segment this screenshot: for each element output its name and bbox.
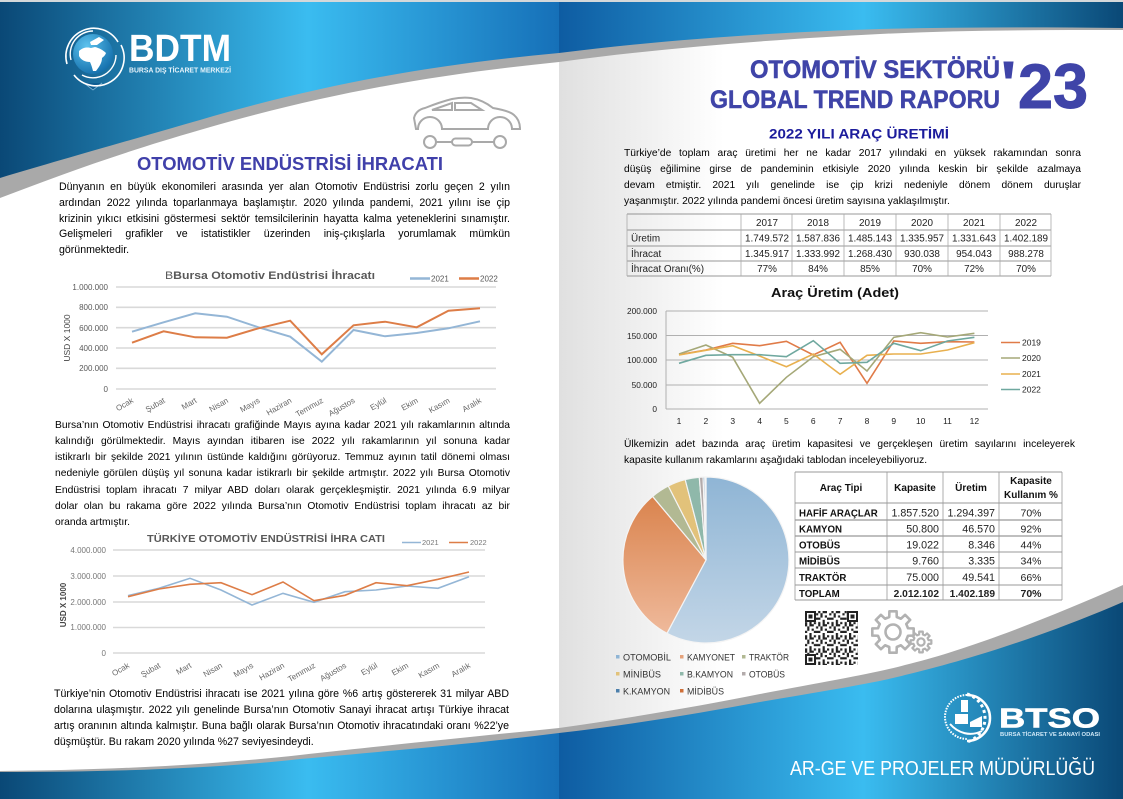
logo subtitle: BURSA TİCARET VE SANAYİ ODASI xyxy=(1000,731,1100,738)
legend: 2022 xyxy=(1022,384,1041,394)
table: capacity usage: 1.857.520 xyxy=(891,508,939,520)
line: 2022 xyxy=(679,337,974,363)
table: production and exports: İhracat Oranı(%) xyxy=(631,264,704,275)
table: capacity usage: 46.570 xyxy=(962,524,995,536)
table: capacity usage: 50.800 xyxy=(906,524,939,536)
text block: capacity intro xyxy=(624,438,1075,466)
table: capacity usage: 75.000 xyxy=(906,572,939,584)
table: capacity usage: 1.294.397 xyxy=(947,508,995,520)
table: capacity usage: Araç Tipi xyxy=(820,483,863,494)
table: capacity usage: KAMYON xyxy=(799,524,842,536)
text block: production intro: devam etmiştir. 2021 yılı genelinde ise çip krizi nedeniyle dönem dönem duruşlar xyxy=(624,180,1081,191)
y axis labels: 0 xyxy=(652,404,657,414)
y axis labels: 0 xyxy=(104,385,109,394)
table: production and exports: 1.402.189 xyxy=(1004,234,1048,244)
y axis labels: 100.000 xyxy=(627,355,657,365)
x axis labels: 3 xyxy=(730,416,735,426)
y axis labels xyxy=(70,546,107,658)
x axis labels: Ekim xyxy=(390,661,410,678)
x axis labels: Aralık xyxy=(450,660,473,679)
line: 2022 xyxy=(132,308,480,354)
banner: top right wave xyxy=(559,2,1123,62)
logo: BDTM xyxy=(66,28,231,90)
table: production and exports: 77% xyxy=(757,264,777,275)
x axis labels: Ağustos xyxy=(318,661,348,683)
x axis labels: 5 xyxy=(784,416,789,426)
report title: OTOMOTİV SEKTÖRÜ xyxy=(750,55,1000,84)
banner: bottom left wave xyxy=(0,728,559,799)
table: capacity usage: 3.335 xyxy=(968,556,995,568)
table: capacity usage: 34% xyxy=(1020,556,1042,568)
pie legend: OTOBÜS xyxy=(749,670,785,680)
text block: intro paragraph: Dünyanın en büyük ekonomileri arasında yer alan Otomotiv Endüstrisi zorlu geçen 2 yılın xyxy=(59,181,510,193)
icon: car with chassis xyxy=(414,98,520,148)
pie legend: MİDİBÜS xyxy=(687,686,724,696)
table: production and exports: 2018 xyxy=(807,218,829,229)
table: capacity usage: 19.022 xyxy=(906,540,939,552)
table: production and exports: 1.749.572 xyxy=(745,234,789,244)
x axis labels: Mart xyxy=(180,396,199,412)
text block: Turkey exports commentary: düşmüştür. Bu rakam 2020 yılında %27 seviyesindeydi. xyxy=(54,736,314,748)
banner: bottom right wave xyxy=(559,585,1123,799)
x axis labels: Şubat xyxy=(144,396,167,414)
pie legend: OTOMOBİL xyxy=(623,652,671,662)
text block: intro paragraph: Gelişmeleri grafikler ve istatistikler üzerinden iniş-çıkışlarla yorumlamak mümkün xyxy=(59,228,510,240)
top edge strip xyxy=(0,0,1123,2)
text block: production intro: Türkiye’de toplam araç üretimi her ne kadar 2017 yılındaki en yüksek rakamından sonra xyxy=(624,148,1081,159)
y axis labels: 600.000 xyxy=(79,324,109,333)
table: production and exports: 930.038 xyxy=(904,249,940,260)
x axis labels: Haziran xyxy=(265,396,293,418)
table: capacity usage: TRAKTÖR xyxy=(799,573,846,584)
x axis labels: Mayıs xyxy=(232,661,255,679)
table: capacity usage: 70% xyxy=(1020,588,1042,600)
line: 2021 xyxy=(679,343,974,374)
table: production and exports: 988.278 xyxy=(1008,249,1044,260)
x axis labels: 7 xyxy=(838,416,843,426)
x axis labels: Aralık xyxy=(461,395,484,414)
text block: Bursa exports commentary: Endüstrisi toplam ihracatı 7 milyar ABD doları olarak gerçekleşmiştir. 2021 yılında 6.9 milyar xyxy=(55,485,510,496)
table: production and exports: 1.587.836 xyxy=(796,234,840,244)
y axis labels: 50.000 xyxy=(632,380,657,390)
report title: GLOBAL TREND RAPORU xyxy=(710,86,1000,114)
icon: BTSO emblem xyxy=(945,694,990,742)
x axis labels: 8 xyxy=(865,416,870,426)
line: 2021 xyxy=(128,577,469,605)
table: capacity usage: 66% xyxy=(1020,572,1042,584)
text block: Bursa exports commentary: istikrarlı bir şekilde 2021 yılının üstünde kaldığını görüyoruz. Temmuz ayının tatil dönemi olması xyxy=(55,452,510,463)
y axis labels: 200.000 xyxy=(627,306,657,316)
text block: production intro: düşüş eğilimine girse de pandeminin etkisiyle 2020 yılında keskin bir şekilde azalmaya xyxy=(624,164,1081,175)
x axis labels: Haziran xyxy=(258,661,286,683)
text block: intro paragraph: görünmektedir. xyxy=(59,244,129,256)
y axis labels: 400.000 xyxy=(79,344,109,353)
y axis labels: 3.000.000 xyxy=(70,572,107,581)
text block: Turkey exports commentary: artış oranının altında kalmıştır. Buna bağlı olarak Bursa’nın Otomotiv ihracatındaki oranı %22’ye xyxy=(54,720,509,732)
table: capacity usage: Kapasite xyxy=(1010,476,1052,487)
x axis labels: Kasım xyxy=(427,396,452,415)
logo wordmark: BDTM xyxy=(129,28,231,70)
y axis labels: 1.000.000 xyxy=(70,623,107,632)
legend: 2021 xyxy=(1022,369,1041,379)
text block: Turkey exports commentary: dolarına ulaşmıştır. 2022 yılı genelinde Bursa’nın Otomotiv Sanayi ihracat artışı Türkiye ihracat xyxy=(54,704,509,716)
logo wordmark: BTSO xyxy=(999,702,1100,734)
pie legend: KAMYONET xyxy=(687,652,735,662)
table: capacity usage: Kullanım % xyxy=(1004,490,1058,501)
text block: production intro xyxy=(624,148,1081,207)
right page gutter shading xyxy=(559,30,724,760)
table: production and exports: 85% xyxy=(860,264,880,275)
table: production and exports: 2022 xyxy=(1015,218,1037,229)
y axis labels: 150.000 xyxy=(627,331,657,341)
text block: Bursa exports commentary: kalındığı görülmektedir. Mayıs ayından itibaren ise 2022 yılı rakamlarının yıl sonuna kadar xyxy=(55,436,510,447)
pie legend: K.KAMYON xyxy=(623,686,670,696)
y axis labels xyxy=(72,283,109,394)
table: capacity usage: TOPLAM xyxy=(799,589,840,600)
line: 2021 xyxy=(132,313,480,362)
y axis labels xyxy=(627,306,657,414)
text block: Bursa exports commentary: Bursa’nın Otomotiv Endüstrisi ihracatı grafiğinde Mayıs ayına kadar 2021 yılı rakamlarının altında xyxy=(55,420,510,431)
heading: left page: OTOMOTİV ENDÜSTRİSİ İHRACATI xyxy=(137,153,443,174)
y axis labels: 800.000 xyxy=(79,303,109,312)
pie legend: MİNİBÜS xyxy=(623,670,661,680)
pie legend: B.KAMYON xyxy=(687,670,733,680)
text block: Bursa exports commentary: nedeniyle görülen düşüş yıl sonuna kadar istikrarlı bir şekilde artmıştır. 2022 yılı Bursa Otomotiv xyxy=(55,468,510,479)
table: production and exports: 1.268.430 xyxy=(848,249,892,260)
x axis labels: 12 xyxy=(970,416,979,426)
report title: 23 xyxy=(1018,52,1088,122)
x axis labels: 4 xyxy=(757,416,762,426)
legend xyxy=(1001,338,1041,394)
x axis labels: 1 xyxy=(677,416,682,426)
x axis labels xyxy=(110,660,473,684)
table: production and exports: 954.043 xyxy=(956,249,992,260)
line: 2022 xyxy=(128,572,469,601)
chart: vehicle production xyxy=(627,285,1041,426)
legend: 2020 xyxy=(1022,353,1041,363)
text block: Bursa exports commentary: dolar olan bu rakama göre 2022 yılında Bursa’nın Otomotiv Endüstrisi toplam ihracatı az bir xyxy=(55,501,510,512)
table: capacity usage: 2.012.102 xyxy=(894,589,939,600)
table: production and exports: 1.345.917 xyxy=(745,249,789,260)
x axis labels xyxy=(114,395,484,419)
icon: globe pin xyxy=(66,28,124,90)
x axis labels: 6 xyxy=(811,416,816,426)
x axis labels: 10 xyxy=(916,416,926,426)
y axis labels: 1.000.000 xyxy=(72,283,109,292)
x axis labels: Eylül xyxy=(369,396,388,412)
x axis labels: 9 xyxy=(891,416,896,426)
table: capacity usage: MİDİBÜS xyxy=(799,556,840,568)
x axis labels: Ocak xyxy=(114,395,136,413)
text block: capacity intro: Ülkemizin adet bazında araç üretim kapasitesi ve gerçekleşen üretim sayılarını inceleyerek xyxy=(624,439,1075,450)
table: production and exports: 1.335.957 xyxy=(900,234,944,244)
legend xyxy=(410,274,498,284)
x axis labels: 2 xyxy=(704,416,709,426)
text block: intro paragraph: ardından 2022 yılında toparlanmaya başlamıştır. 2020 yılında pandemi, 2021 yılını ise çip xyxy=(59,197,510,209)
table: production and exports: 1.485.143 xyxy=(848,234,892,244)
table: capacity usage: 92% xyxy=(1020,524,1042,536)
table: capacity usage: HAFİF ARAÇLAR xyxy=(799,508,878,520)
chart: pie of vehicle types xyxy=(623,477,789,643)
icon: gears xyxy=(872,611,931,653)
text block: capacity intro: kapasite kullanım rakamlarını aşağıdaki tablodan inceleyebiliyoruz. xyxy=(624,454,927,466)
table: production and exports: 72% xyxy=(964,264,984,275)
table: capacity usage: 49.541 xyxy=(962,572,995,584)
logo subtitle: BURSA DIŞ TİCARET MERKEZİ xyxy=(129,66,231,74)
table: capacity usage: Üretim xyxy=(955,481,987,494)
report title xyxy=(710,52,1088,122)
x axis labels: Ekim xyxy=(400,396,420,413)
table: capacity usage: 9.760 xyxy=(912,556,939,568)
x axis labels: Temmuz xyxy=(286,661,317,684)
table: production and exports: 1.333.992 xyxy=(796,249,840,260)
x axis labels: Nisan xyxy=(202,661,224,679)
x axis labels: 11 xyxy=(943,416,952,426)
table: capacity usage xyxy=(795,472,1062,600)
table: production and exports: 2021 xyxy=(963,218,985,229)
x axis labels: Şubat xyxy=(139,661,163,679)
banner: top left wave xyxy=(0,2,559,198)
x axis labels: Mart xyxy=(175,661,194,677)
text block: Bursa exports commentary: oranda artmıştır. xyxy=(55,517,130,528)
line: 2020 xyxy=(679,333,974,403)
table: capacity usage: Kapasite xyxy=(894,483,936,494)
x axis labels: Ağustos xyxy=(327,396,356,418)
table: capacity usage: OTOBÜS xyxy=(799,540,841,552)
table: production and exports: 1.331.643 xyxy=(952,234,996,244)
text block: production intro: yaşanmıştır. 2022 yılında pandemi öncesi üretim sayısına yaklaşılmıştır. xyxy=(624,196,950,207)
x axis labels: Kasım xyxy=(417,661,441,680)
text block: Turkey exports commentary xyxy=(54,688,509,748)
legend: 2021 xyxy=(431,274,449,284)
x axis labels: Mayıs xyxy=(239,396,262,414)
table: production and exports: 84% xyxy=(808,264,828,275)
table: capacity usage: 44% xyxy=(1020,540,1042,552)
text block: Bursa exports commentary xyxy=(55,420,510,528)
x axis labels xyxy=(677,416,979,426)
text block: intro paragraph: krizinin yıkıcı etkisini göstermesi sektör temsilcilerinin hayatta kalma yeteneklerini sınamıştır. xyxy=(59,212,510,224)
chart title: BBursa Otomotiv Endüstrisi İhracatı xyxy=(165,269,375,282)
pie legend: TRAKTÖR xyxy=(749,652,789,662)
table: production and exports: 70% xyxy=(1016,264,1036,275)
legend: 2022 xyxy=(480,274,498,284)
heading: right page: 2022 YILI ARAÇ ÜRETİMİ xyxy=(769,126,949,142)
chart title: TÜRKİYE OTOMOTİV ENDÜSTRİSİ İHRA CATI xyxy=(147,532,385,545)
table: production and exports: 2019 xyxy=(859,218,881,229)
chart: Turkey automotive exports xyxy=(59,532,487,684)
table: production and exports: Üretim xyxy=(631,234,660,244)
y axis title: USD X 1000 xyxy=(62,314,72,362)
x axis labels: Nisan xyxy=(208,396,230,414)
table: production and exports xyxy=(627,214,1051,276)
table: production and exports: 2017 xyxy=(756,218,778,229)
table: production and exports: 2020 xyxy=(911,218,933,229)
x axis labels: Ocak xyxy=(110,660,132,678)
legend: 2021 xyxy=(422,538,439,547)
y axis labels: 200.000 xyxy=(79,364,109,373)
chart: Bursa automotive exports xyxy=(62,269,498,419)
table: capacity usage: 8.346 xyxy=(968,540,995,552)
department name: AR-GE VE PROJELER MÜDÜRLÜĞÜ xyxy=(790,757,1095,780)
text block: intro paragraph xyxy=(59,181,510,256)
legend: 2019 xyxy=(1022,338,1041,348)
y axis labels: 4.000.000 xyxy=(70,546,107,555)
table: capacity usage: 70% xyxy=(1020,508,1042,520)
text block: Turkey exports commentary: Türkiye’nin Otomotiv Endüstrisi ihracatı ise 2021 yılına göre %6 artış göstererek 31 milyar ABD xyxy=(54,688,509,700)
legend: 2022 xyxy=(470,538,487,547)
x axis labels: Eylül xyxy=(359,661,379,677)
table: production and exports: İhracat xyxy=(631,249,661,260)
icon: QR code xyxy=(805,611,858,665)
chart title: Araç Üretim (Adet) xyxy=(771,285,899,300)
y axis labels: 0 xyxy=(102,649,107,658)
pie legend xyxy=(616,652,789,696)
legend xyxy=(402,538,487,547)
y axis title: USD X 1000 xyxy=(59,582,68,627)
x axis labels: Temmuz xyxy=(294,396,325,419)
line: 2019 xyxy=(679,341,974,383)
table: capacity usage: 1.402.189 xyxy=(950,589,995,600)
logo: BTSO xyxy=(945,694,1100,742)
table: production and exports: 70% xyxy=(912,264,932,275)
y axis labels: 2.000.000 xyxy=(70,598,107,607)
